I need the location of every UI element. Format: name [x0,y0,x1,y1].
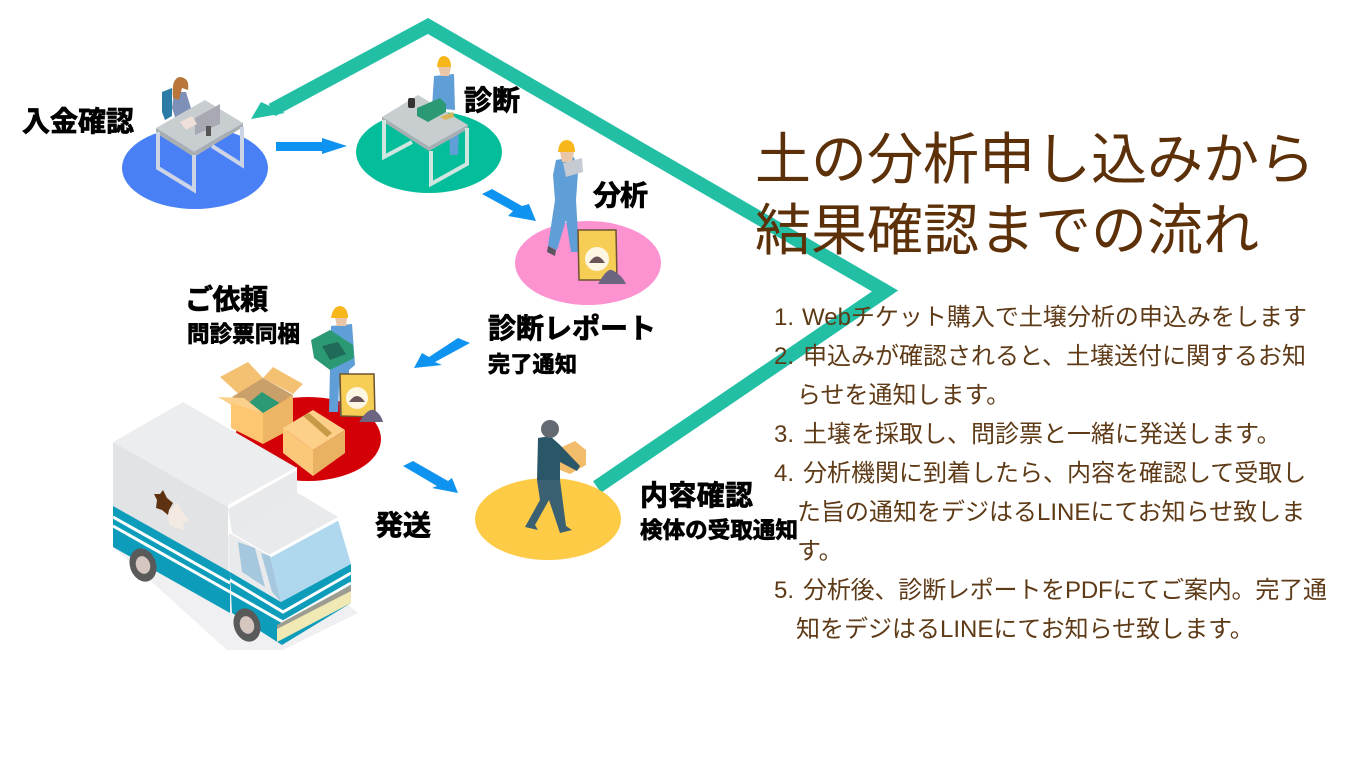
text block: numbered process steps: 3. [774,421,794,448]
arrow: large teal return arrow [251,26,885,487]
text block: numbered process steps: Webチケット購入で土壌分析の申込みをします [802,304,1307,331]
label: sample receipt notice: 検体の受取通知 [640,518,798,543]
text block: numbered process steps: らせを通知します。 [797,382,1010,409]
step: request, red circle with worker, bag and boxes [218,306,383,481]
label: enclosed questionnaire: 問診票同梱 [187,322,300,347]
text block: numbered process steps: 知をデジはるLINEにてお知らせ致します。 [796,616,1254,643]
title [755,128,1315,262]
step: content check, yellow circle with person carrying box [475,420,621,560]
arrow: blue arrow to request [414,338,470,368]
label: analysis: 分析 [593,180,648,211]
text block: numbered process steps: 土壌を採取し、問診票と一緒に発送します。 [803,421,1281,448]
text block: numbered process steps: 申込みが確認されると、土壌送付に関するお知 [803,343,1306,370]
text block: numbered process steps: 分析機関に到着したら、内容を確認して受取し [803,460,1306,487]
arrow: blue arrow to shipping [403,461,458,493]
label: shipping: 発送 [375,510,431,541]
title: 結果確認までの流れ [755,199,1259,262]
label: payment confirmation: 入金確認 [22,106,134,137]
label: diagnosis: 診断 [464,85,520,116]
step: analysis, pink circle with worker and soil bag [515,140,661,305]
arrow: blue arrow to analysis [482,189,536,221]
text block: numbered process steps: 2. [774,343,794,370]
label: completion notice: 完了通知 [488,352,577,377]
label: diagnostic report: 診断レポート [488,313,656,344]
text block: numbered process steps: 分析後、診断レポートをPDFにてご案内。完了通 [803,577,1327,604]
step: diagnosis, green circle with worker at desk [356,56,502,193]
text block: numbered process steps [774,304,1327,643]
text block: numbered process steps: 1. [774,304,794,331]
illustration: delivery truck [113,402,358,650]
title: 土の分析申し込みから [755,128,1315,191]
text block: numbered process steps: す。 [797,538,843,565]
text block: numbered process steps: 4. [774,460,794,487]
text block: numbered process steps: た旨の通知をデジはるLINEにてお知らせ致しま [797,499,1305,526]
arrow: blue arrow to diagnosis [276,138,347,154]
label: request: ご依頼 [185,283,268,315]
step: payment confirmation, blue circle with desk worker [122,77,268,209]
text block: numbered process steps: 5. [774,577,794,604]
label: content check: 内容確認 [640,480,753,511]
